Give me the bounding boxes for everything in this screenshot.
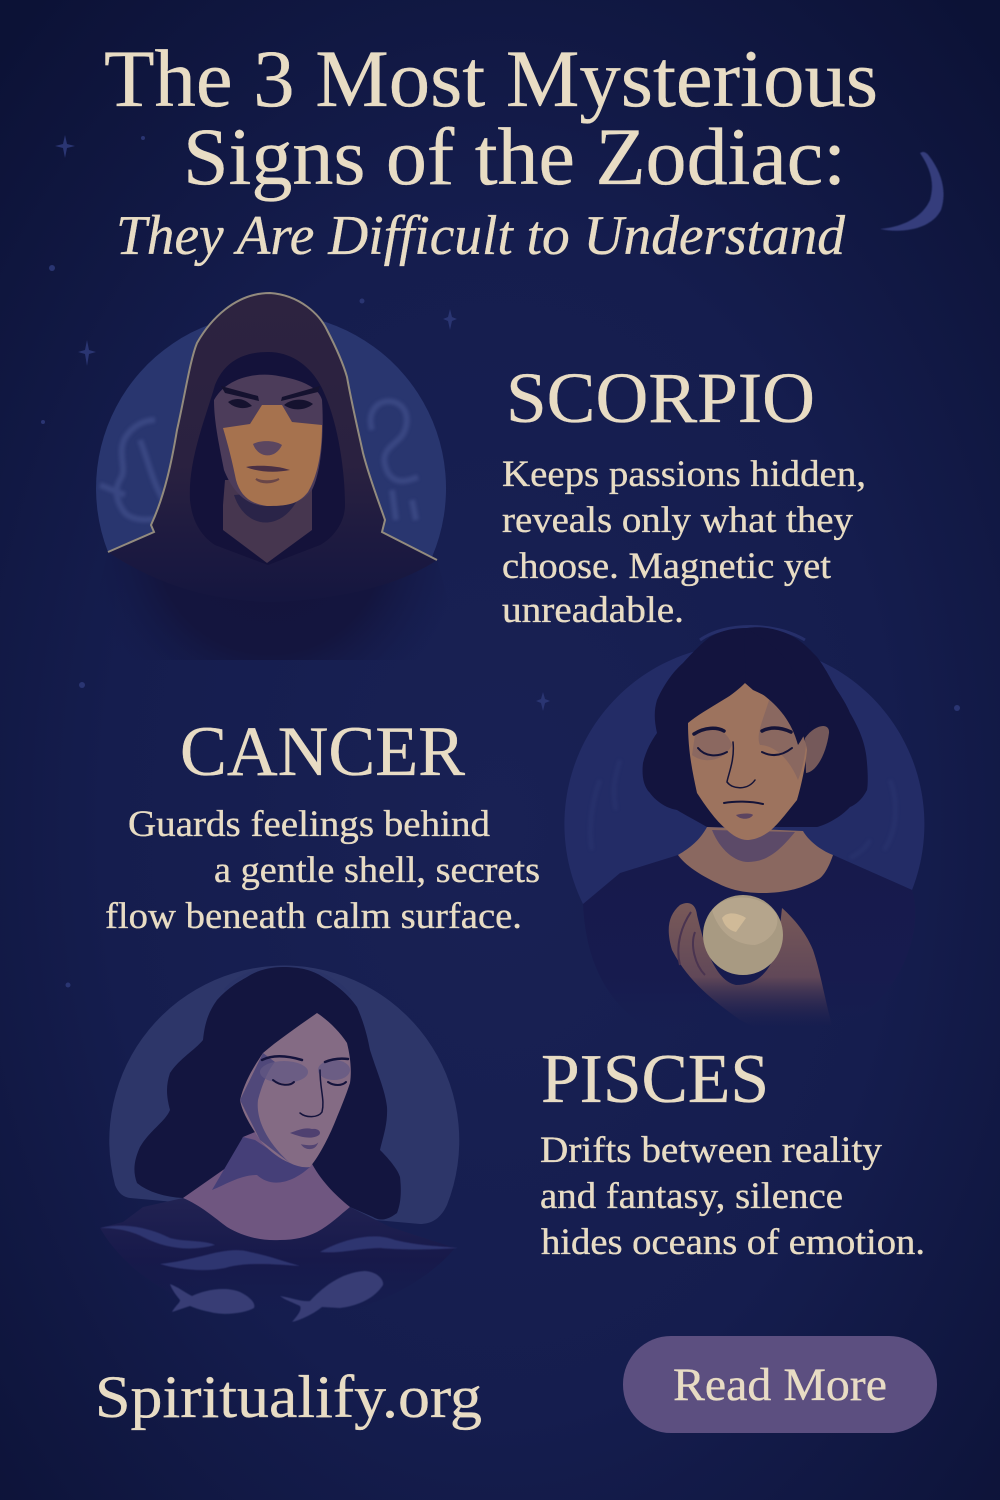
face xyxy=(240,1013,351,1167)
face upper shadow xyxy=(214,375,323,506)
heading: cancer: CANCER xyxy=(180,713,466,791)
body xyxy=(583,855,915,1030)
decorative stars xyxy=(41,135,960,988)
text: scorpio description: reveals only what they xyxy=(502,500,854,541)
text: cancer description: flow beneath calm surface. xyxy=(105,896,522,937)
text: scorpio description: unreadable. xyxy=(502,590,684,631)
eyes, brows, nose, mouth xyxy=(694,728,792,804)
dress xyxy=(100,1198,455,1320)
face shadow xyxy=(759,697,806,780)
read more button: Read More xyxy=(673,1359,887,1411)
crystal orb xyxy=(703,895,783,975)
moon disc top glow xyxy=(700,626,805,640)
text: scorpio description: choose. Magnetic yet xyxy=(502,546,832,587)
mouth xyxy=(246,466,290,472)
text: cancer description: Guards feelings behind xyxy=(128,804,491,845)
heading: scorpio: SCORPIO xyxy=(506,358,815,438)
moon disc top rim xyxy=(225,967,350,995)
face lines xyxy=(262,1056,348,1117)
hair xyxy=(134,967,401,1220)
hands holding orb xyxy=(669,903,832,1030)
eye socket shadow xyxy=(692,728,732,760)
text: cancer description xyxy=(105,804,540,937)
icon: right fish xyxy=(280,1271,383,1322)
hair fringe xyxy=(744,628,810,745)
read more button xyxy=(623,1336,937,1433)
neck and chest xyxy=(678,827,833,893)
title: The 3 Most Mysterious xyxy=(104,33,878,124)
text: scorpio description xyxy=(502,454,866,631)
orb highlight xyxy=(712,897,777,945)
neck shadow xyxy=(212,1137,310,1190)
text: pisces description: and fantasy, silence xyxy=(540,1176,843,1217)
eyebrows and eyes xyxy=(221,386,320,409)
lit face xyxy=(223,405,322,506)
icon: left fish xyxy=(170,1284,254,1314)
moon disc behind scorpio xyxy=(96,313,446,557)
orb glint xyxy=(722,913,746,932)
icon: crescent moon xyxy=(880,152,944,231)
text: pisces description: Drifts between reality xyxy=(540,1130,883,1171)
body cloak xyxy=(80,532,465,660)
neck xyxy=(223,480,312,563)
text: scorpio description: Keeps passions hidden, xyxy=(502,454,866,495)
panel: pisces illustration xyxy=(100,966,459,1322)
moon disc behind cancer xyxy=(564,644,924,904)
water waves xyxy=(100,1226,458,1270)
eye socket shadows xyxy=(260,1060,350,1083)
title: They Are Difficult to Understand xyxy=(116,205,846,267)
neck shadow xyxy=(712,830,795,862)
face shadow xyxy=(240,1053,290,1163)
moon disc behind pisces xyxy=(109,966,459,1224)
heading: pisces: PISCES xyxy=(541,1041,769,1118)
hood inner shadow xyxy=(190,352,345,565)
text: pisces description: hides oceans of emotion. xyxy=(541,1222,925,1263)
text: pisces description xyxy=(540,1130,925,1263)
hood xyxy=(108,293,437,602)
hood outline xyxy=(108,293,437,560)
face xyxy=(688,683,807,840)
ear xyxy=(805,726,829,773)
neck shadow xyxy=(234,490,302,522)
title xyxy=(104,33,878,267)
title: Signs of the Zodiac: xyxy=(183,111,846,202)
panel: cancer illustration xyxy=(564,626,924,1030)
chin shadow xyxy=(302,1144,317,1149)
neck and chest xyxy=(183,1130,350,1240)
lips xyxy=(290,1128,320,1138)
panel: scorpio illustration xyxy=(80,293,465,660)
nose xyxy=(253,441,282,455)
website name: Spiritualify.org xyxy=(95,1364,482,1430)
finger lines xyxy=(678,912,705,975)
lower lip xyxy=(736,814,753,819)
disc texture xyxy=(590,760,895,858)
scorpion glyphs xyxy=(100,401,418,520)
text: cancer description: a gentle shell, secrets xyxy=(214,850,540,891)
hair xyxy=(643,627,868,827)
